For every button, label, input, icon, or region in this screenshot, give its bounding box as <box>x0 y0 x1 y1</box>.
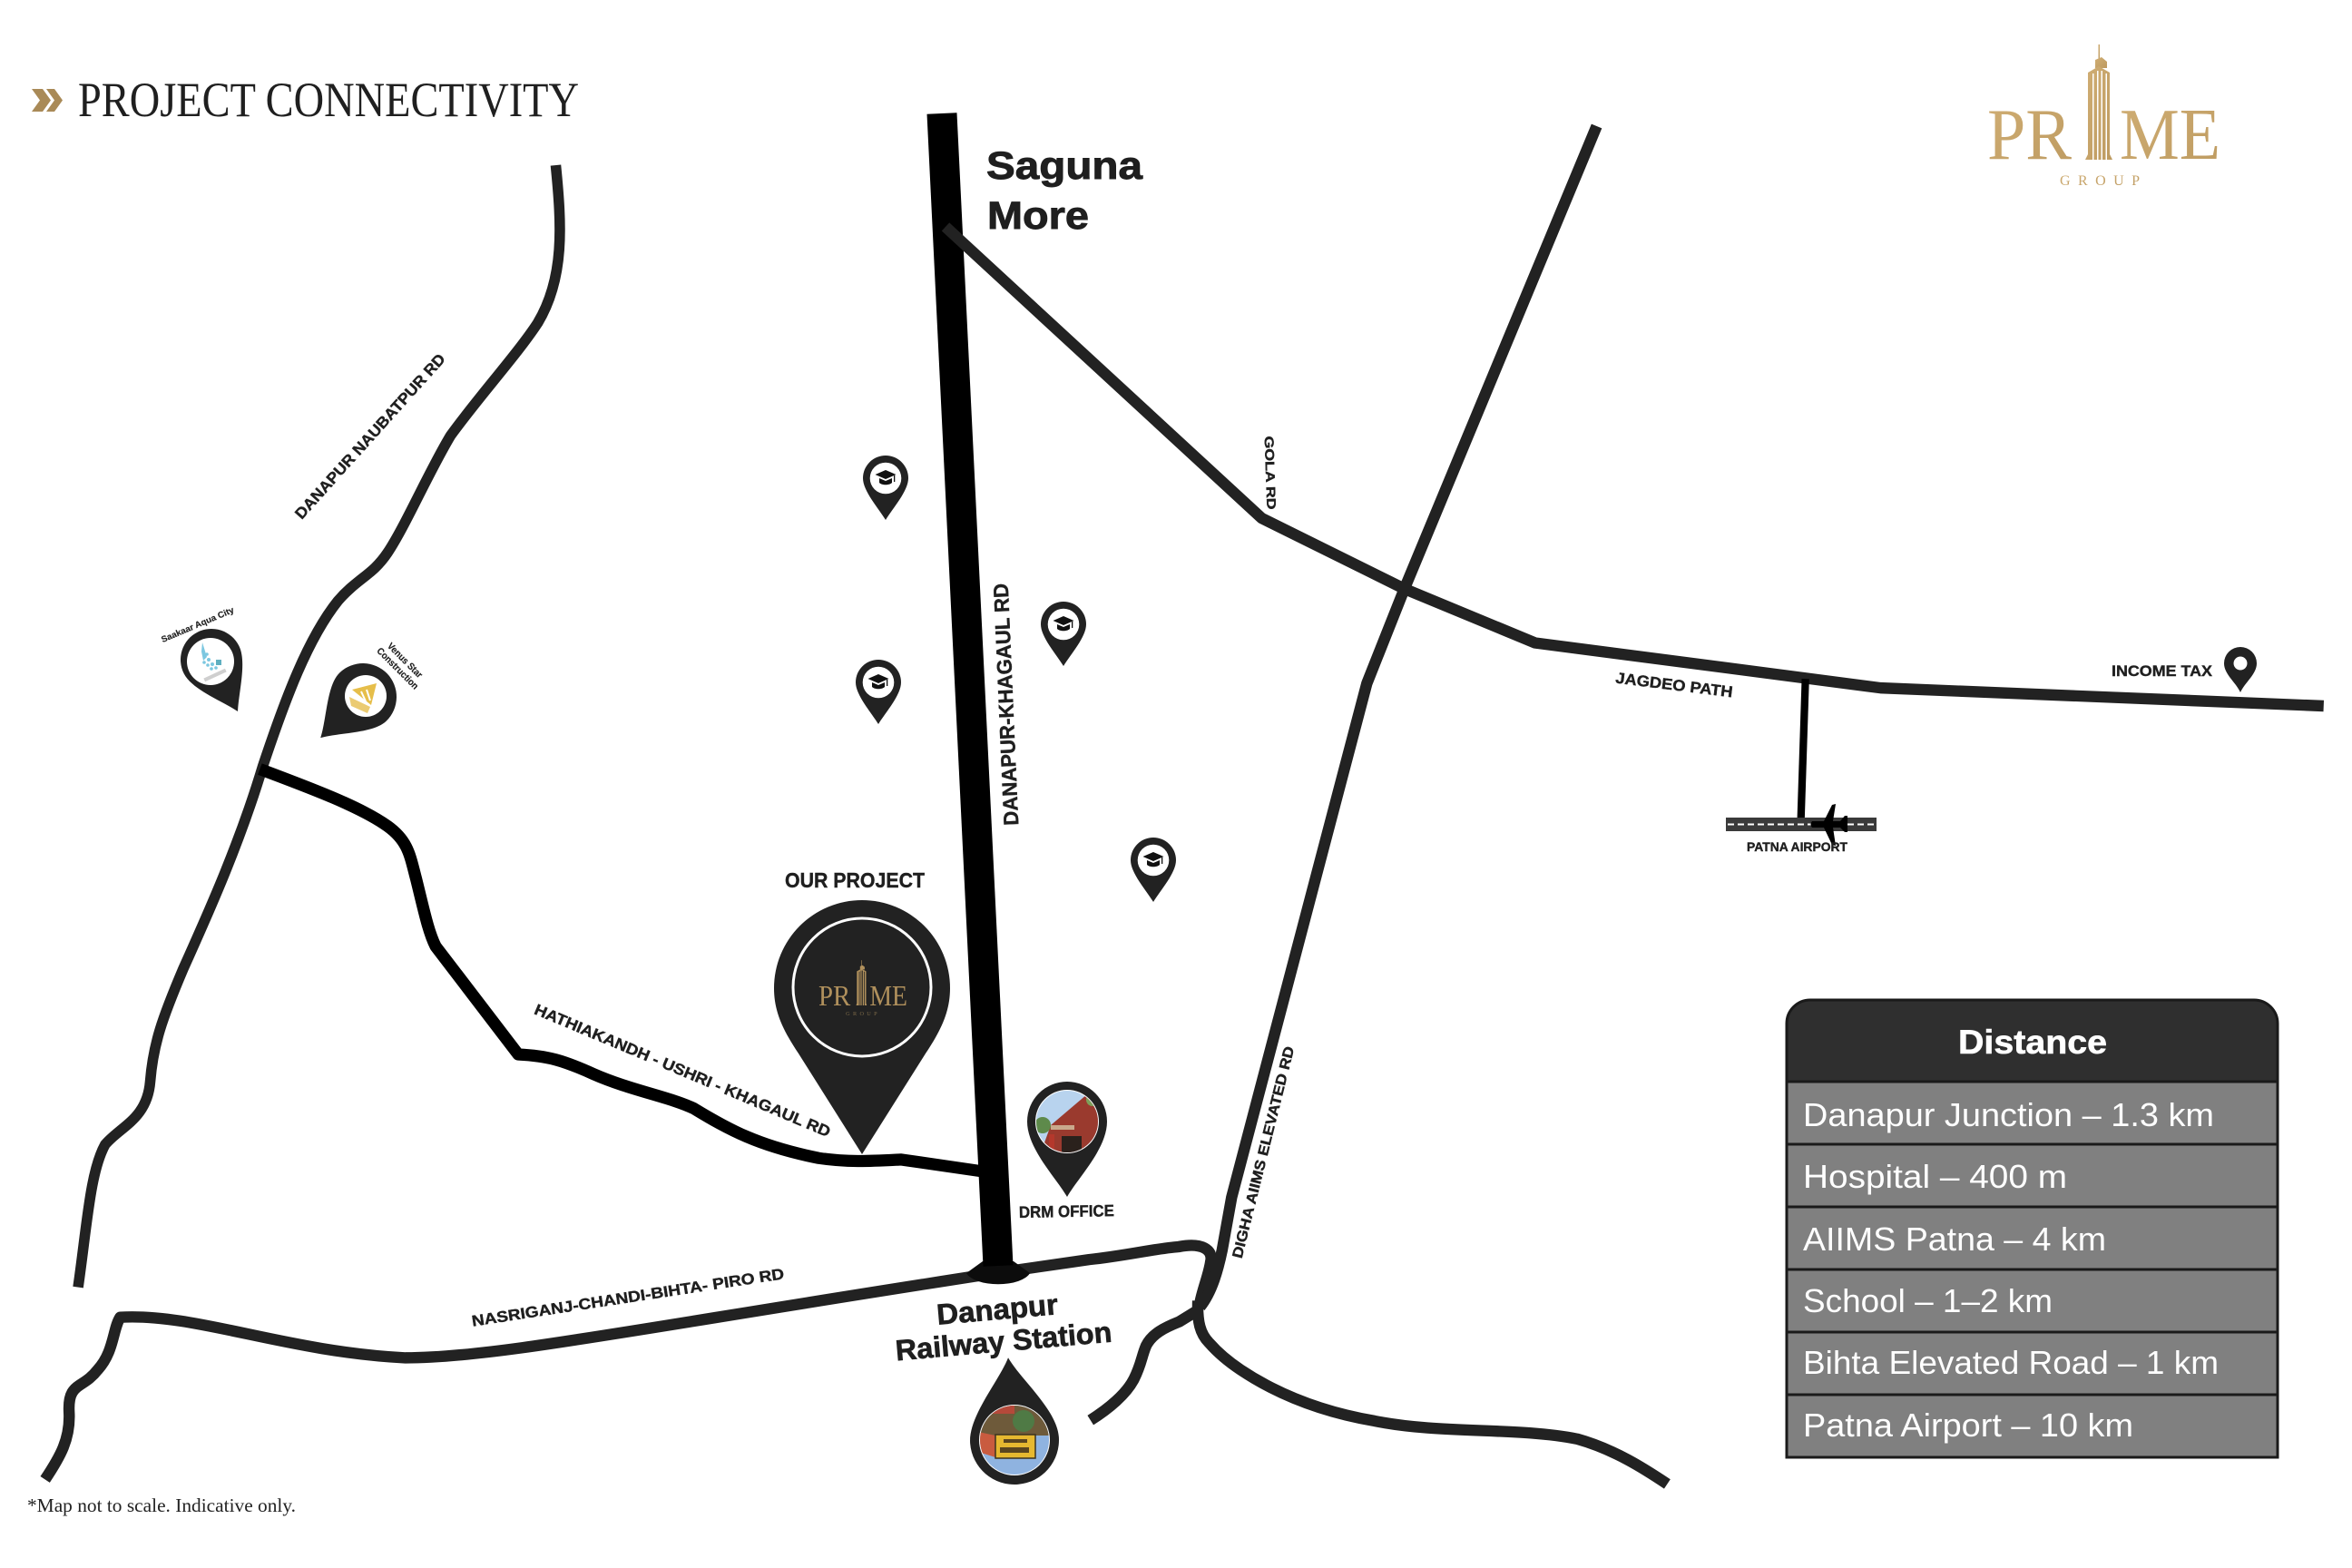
icon: school pin 4 <box>1131 838 1176 902</box>
runway <box>1726 818 1877 831</box>
road: Nasriganj-Chandi-Bihta-Piro Rd <box>45 1245 1211 1479</box>
label: Saguna More: Saguna <box>986 144 1143 188</box>
logo: Prime Group: GROUP <box>2060 173 2140 189</box>
label: Nasriganj-Chandi-Bihta-Piro Rd: NASRIGANJ-CHANDI-BIHTA- PIRO RD <box>471 1265 785 1330</box>
row text: Danapur Junction – 1.3 km <box>1803 1096 2214 1133</box>
label: Gola Rd: GOLA RD <box>1262 436 1279 510</box>
marker: Patna airport <box>1726 804 1877 854</box>
road: lower left branch <box>1091 1309 1199 1420</box>
label: our project: OUR PROJECT <box>785 868 925 892</box>
panel: distance table: Distance <box>1958 1024 2107 1061</box>
panel: distance table <box>1787 1000 2278 1457</box>
road network: lower layer <box>45 165 1667 1484</box>
logo in pin: GROUP <box>846 1011 877 1017</box>
logo: Prime Group <box>1987 44 2220 189</box>
label: Construction: Construction <box>375 646 420 691</box>
marker: income tax <box>2112 647 2257 692</box>
label: Digha AIIMS Elevated Rd: DIGHA AIIMS ELEVATED RD <box>1230 1045 1298 1259</box>
label: Danapur Railway Station <box>894 1288 1113 1367</box>
label: Jagdeo Path: JAGDEO PATH <box>1614 670 1734 701</box>
icon: Saakaar logo <box>201 642 221 671</box>
marker: Saakaar Aqua City <box>160 605 265 725</box>
row text: School – 1–2 km <box>1803 1282 2053 1319</box>
table header <box>1787 1000 2278 1082</box>
heading: project connectivity <box>32 73 579 127</box>
label: Danapur Naubatpur Rd: DANAPUR NAUBATPUR RD <box>291 350 449 523</box>
label: Saguna More: More <box>987 194 1089 238</box>
label: Saakaar Aqua City: Saakaar Aqua City <box>160 605 236 645</box>
icon: school pin 3 <box>856 660 901 724</box>
label: DRM office: DRM OFFICE <box>1019 1201 1114 1221</box>
icon: school pin 2 <box>1041 602 1086 666</box>
marker: our project <box>774 868 950 1154</box>
label: Saguna More <box>986 144 1143 238</box>
icon: Venus logo <box>349 683 377 713</box>
road: Danapur Naubatpur Rd <box>78 165 560 1288</box>
row text: Bihta Elevated Road – 1 km <box>1803 1344 2219 1381</box>
icon: school pin 1 <box>863 456 908 520</box>
label: Venus Star: Venus Star <box>385 641 425 681</box>
road: Digha AIIMS Elevated Rd <box>1200 126 1597 1307</box>
label: income tax: INCOME TAX <box>2112 663 2212 680</box>
marker: Venus Star Construction <box>298 641 425 762</box>
icon: plane <box>1811 804 1847 846</box>
road network: upper layer <box>946 126 2324 1307</box>
row text <box>1803 1096 2219 1444</box>
label: Danapur Railway Station: Danapur <box>936 1288 1059 1331</box>
logo in pin: PR <box>818 979 851 1012</box>
photo: station sign <box>978 1405 1051 1477</box>
table rows <box>1787 1082 2278 1457</box>
logo: Prime Group: PR <box>1987 95 2073 175</box>
logo: Prime Group: ME <box>2120 95 2220 175</box>
row text: Hospital – 400 m <box>1803 1158 2067 1195</box>
marker: DRM office <box>1019 1082 1114 1221</box>
road: Hathiakandh-Ushri-Khagaul Rd <box>260 769 984 1171</box>
label: Danapur Railway Station: Railway Station <box>894 1316 1113 1367</box>
logo in pin: ME <box>869 979 907 1012</box>
logo in pin <box>818 960 907 1017</box>
title text: PROJECT CONNECTIVITY <box>78 73 579 127</box>
road: Gola Rd and Jagdeo Path <box>946 227 2324 706</box>
row text: AIIMS Patna – 4 km <box>1803 1220 2106 1258</box>
marker: Danapur railway station <box>970 1357 1059 1485</box>
road: airport connector <box>1801 679 1806 818</box>
label: Danapur-Khagaul Rd: DANAPUR-KHAGAUL RD <box>989 583 1023 826</box>
footnote: *Map not to scale. Indicative only. <box>27 1494 296 1516</box>
road: lower right branch <box>1198 1300 1667 1484</box>
label: Hathiakandh-Ushri-Khagaul Rd: HATHIAKANDH - USHRI - KHAGAUL RD <box>532 1001 833 1141</box>
row text: Patna Airport – 10 km <box>1803 1406 2133 1444</box>
road: Danapur-Khagaul Rd (main thick) <box>942 113 1030 1284</box>
icon: double chevron <box>32 89 63 112</box>
photo: DRM office building <box>1036 1091 1098 1152</box>
label: Patna airport: PATNA AIRPORT <box>1747 839 1847 854</box>
